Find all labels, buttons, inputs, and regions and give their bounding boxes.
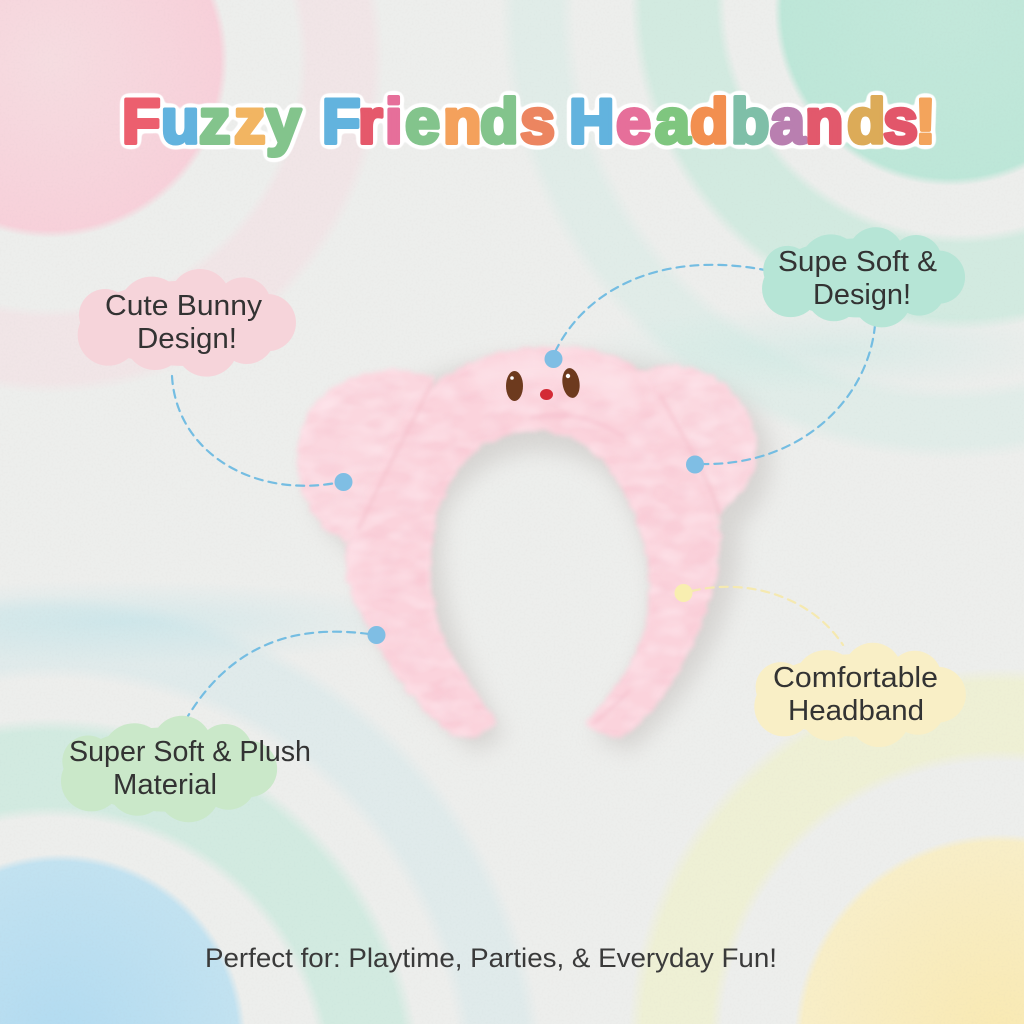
anchor dot: right ear [686,456,704,474]
title: a [770,87,806,157]
title: u [161,87,199,157]
anchor dot: left ear [334,473,352,491]
title: e [616,87,651,157]
headband shadow [313,357,772,752]
title: z [199,87,230,157]
headband [298,347,772,752]
title: e [405,87,440,157]
callout: Super Soft and Plush Material [61,716,311,822]
band [346,347,720,738]
callout: Cute Bunny Design: Design! [137,323,237,355]
callout: Super Soft and Plush Material: Material [113,769,217,801]
title: s [883,87,918,157]
title: i [385,87,403,157]
leader line: Cute Bunny Design [172,376,336,486]
title: F [122,87,160,157]
title: d [847,87,885,157]
anchor dot: left band [368,626,386,644]
face: eyes and nose [506,367,582,401]
title: n [805,87,843,157]
anchor dot: top of band [544,350,562,368]
right ear [636,365,757,518]
callout: Comfortable Headband [754,643,966,747]
leader line: right ear [702,325,875,464]
leader line: Comfortable Headband [692,587,843,645]
leader line: Supe Soft Design [555,265,765,352]
title: F [322,87,360,157]
callout: Comfortable Headband: Comfortable [773,662,938,694]
callout: Supe Soft and Design: Supe Soft & [778,246,937,278]
leader line: Super Soft and Plush [188,632,369,716]
title: s [520,87,555,157]
callout: Supe Soft and Design: Design! [813,279,911,311]
callout: Comfortable Headband: Headband [788,695,924,727]
callout: Cute Bunny Design [78,269,296,377]
title: r [358,87,383,157]
title: y [266,87,301,157]
left ear [298,370,436,543]
title: n [443,87,481,157]
title: ! [915,87,936,157]
callout: Super Soft and Plush Material: Super Soft & Plush [69,736,311,768]
title: b [731,87,769,157]
title: H [569,87,614,157]
fur highlights and creases [358,368,720,724]
footer tagline: Perfect for: Playtime, Parties, & Everyday Fun! [205,943,777,973]
title: z [234,87,266,157]
anchor dot: right band [674,584,692,602]
callout: Supe Soft and Design [762,227,965,327]
title: d [480,87,518,157]
callout: Cute Bunny Design: Cute Bunny [105,290,263,322]
title: d [690,87,728,157]
title: a [655,87,691,157]
